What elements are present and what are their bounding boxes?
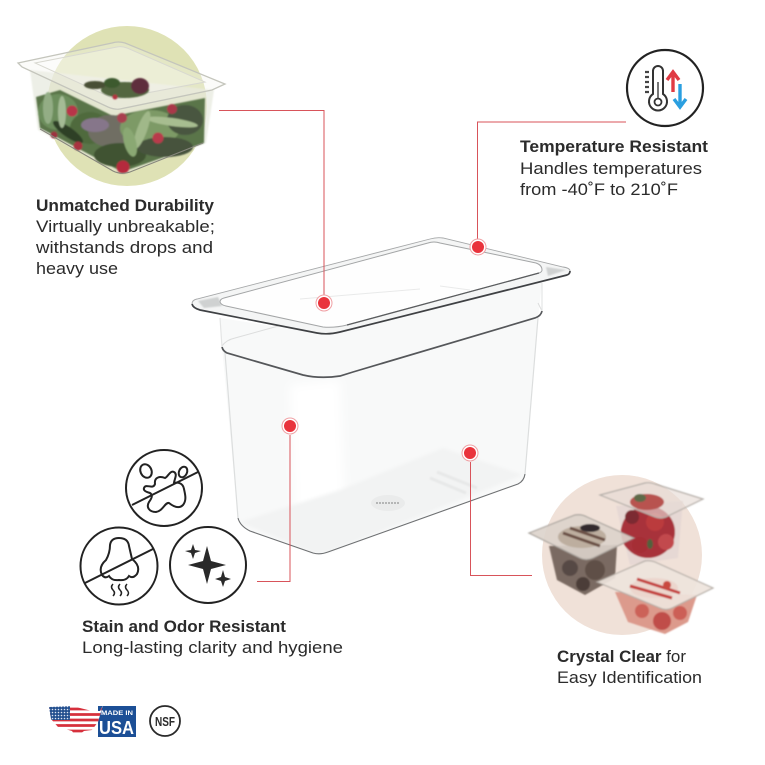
rim xyxy=(192,238,570,334)
pan body xyxy=(220,272,542,554)
connector: crystal clear xyxy=(470,462,532,576)
text: crystal clear: Crystal Clear for xyxy=(557,647,686,666)
rim shadow edge xyxy=(192,271,570,334)
rim corner shading xyxy=(198,267,566,308)
icon: temperature xyxy=(627,50,703,126)
container: dark food xyxy=(529,515,634,595)
pan opening xyxy=(220,242,542,327)
text: unmatched durability: heavy use xyxy=(36,259,118,278)
base outline xyxy=(238,474,525,554)
marker: rim xyxy=(316,295,332,311)
pan rim xyxy=(18,42,225,109)
marker: floor xyxy=(462,445,478,461)
text: stain and odor resistant: Stain and Odor Resistant xyxy=(82,617,286,636)
icon: no stains xyxy=(126,450,202,526)
photo: salad in clear pan xyxy=(18,26,225,186)
text: temperature resistant: from -40˚F to 210˚F xyxy=(520,180,678,199)
text: unmatched durability: Virtually unbreakable; xyxy=(36,217,215,236)
text: crystal clear xyxy=(557,647,702,687)
text: crystal clear: Easy Identification xyxy=(557,668,702,687)
pan floor xyxy=(240,448,523,553)
text: stain and odor resistant xyxy=(82,617,343,657)
marker: side wall xyxy=(282,418,298,434)
drain mark xyxy=(371,495,405,511)
text: unmatched durability: withstands drops and xyxy=(35,238,213,257)
icon: no odors xyxy=(80,528,158,604)
badge: made in USA xyxy=(49,706,136,737)
clear pan body xyxy=(30,70,214,174)
product: main clear food pan xyxy=(192,238,570,554)
map flag xyxy=(49,706,103,732)
text: temperature resistant: Temperature Resistant xyxy=(520,137,708,156)
salad heap xyxy=(84,78,149,100)
text: stain and odor resistant: Long-lasting clarity and hygiene xyxy=(82,638,343,657)
badge: NSF: NSF xyxy=(155,714,175,729)
badge: NSF xyxy=(150,706,180,736)
badge: made in USA: USA xyxy=(99,718,134,738)
connector: durability xyxy=(219,110,324,295)
text: temperature resistant xyxy=(520,137,708,199)
pan highlight xyxy=(290,380,345,520)
badge: made in USA: MADE IN xyxy=(101,711,133,717)
connector: temperature xyxy=(478,122,626,240)
photo: three containers with lids xyxy=(529,475,713,635)
container: sliced strawberries xyxy=(597,561,713,634)
marker: corner xyxy=(470,239,486,255)
icon: sparkle xyxy=(170,527,246,603)
text: temperature resistant: Handles temperatures xyxy=(520,159,702,178)
container: strawberries xyxy=(600,483,703,565)
salad greens xyxy=(36,90,205,174)
text: unmatched durability: Unmatched Durability xyxy=(36,196,215,215)
text: unmatched durability xyxy=(35,196,215,278)
connector: stain and odor xyxy=(257,435,290,582)
lower ledge dark line xyxy=(222,311,542,377)
